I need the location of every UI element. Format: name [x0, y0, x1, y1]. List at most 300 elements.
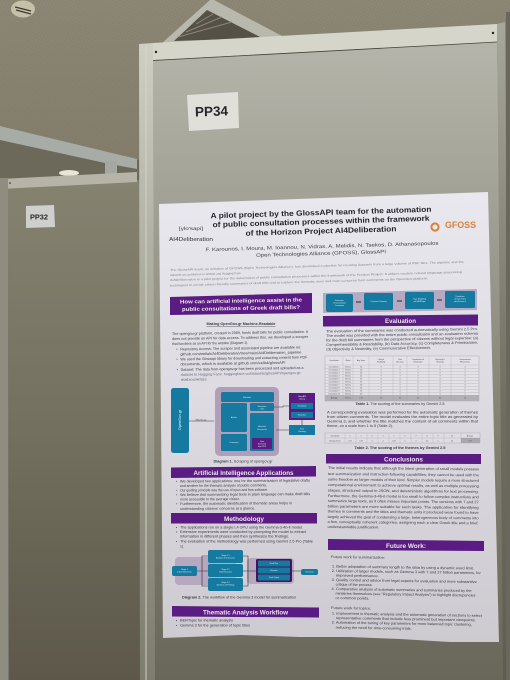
- table 1: summaries scoring: Consultation 5: [329, 377, 339, 380]
- flow strip: consultation pipeline: with Gemma 3: [454, 300, 466, 303]
- table 2: themes scoring: 4: [383, 435, 384, 437]
- table 1: summaries scoring: Objectivity &: [435, 358, 446, 361]
- panel: main display board: [139, 12, 510, 680]
- table 2: themes scoring: 4.33: [392, 440, 396, 442]
- text block: evaluation: for the draft bill summaries from the perspective of citizens without legal expertise: (a): [326, 336, 478, 342]
- table 1: summaries scoring: 3: [381, 390, 382, 392]
- text block: opengov description: •: [177, 368, 179, 372]
- table 1: summaries scoring: 3: [418, 387, 419, 389]
- text block: future work for topics: Future work for topics:: [331, 606, 371, 611]
- heading: artificial intelligence applications: Artificial Intelligence Applications: [194, 470, 294, 477]
- node: stage 3 group: Draft Plan: [270, 562, 278, 565]
- text block: AI applications bullets: [176, 479, 310, 511]
- heading: thematic analysis workflow: [172, 606, 319, 618]
- text block: AI applications bullets: We developed two applications: one for the summarization of legislative drafts: [180, 479, 310, 483]
- table 1: summaries scoring: Gemma: [345, 393, 351, 395]
- text block: future work for summarization: [330, 555, 482, 602]
- table 1: summaries scoring: 3: [400, 381, 401, 383]
- table 1: summaries scoring: Gemma: [345, 375, 351, 377]
- table 2: themes scoring: 2: [361, 435, 362, 437]
- node: stage 2 boxes: Synthesis of Findings: [217, 584, 235, 586]
- table 1: summaries scoring: 3: [440, 372, 441, 374]
- table 1: summaries scoring: Consultation 4: [329, 374, 339, 377]
- group: scraped content: Metadata: [243, 396, 252, 399]
- group: scraped content: Document: [258, 405, 267, 408]
- text block: methodology bullets: information in different phases and then synthesize the findings.: [180, 534, 289, 538]
- table 2: themes scoring: 10: [451, 435, 453, 437]
- text block: future work for summarization: 1. Better adaptation of summary length to the data by using a dynamic word limit.: [332, 565, 474, 570]
- node: stage 2 boxes: [208, 550, 243, 591]
- heading: how can AI assist: How can artificial intelligence assist in the: [180, 297, 302, 306]
- table 1: summaries scoring: 3: [440, 387, 441, 389]
- group: scraped content: Documents: [257, 428, 267, 431]
- table 1: summaries scoring: Gemma: [345, 372, 351, 374]
- text block: evaluation: The model was provided with the entire public consultation and an evaluation schema: [326, 332, 478, 338]
- node: stage 2 boxes: Data Extraction: [219, 570, 232, 574]
- text block: opengov description: •: [176, 347, 178, 351]
- text block: conclusions: a few, conceptually coherent categories, assigning each a clear Greek title and a brief,: [328, 520, 479, 525]
- table 2: themes scoring: 4: [383, 440, 384, 442]
- table 1: summaries scoring: 3: [400, 369, 401, 371]
- table 1: summaries scoring: 3: [418, 381, 419, 383]
- group: scraped content: Extracted: [258, 442, 266, 446]
- intro text: datasets are published on GitHub and Hugging Face.: [170, 271, 242, 277]
- table 1: summaries scoring: 2.8: [360, 384, 362, 386]
- table 1: summaries scoring: 2.8: [360, 387, 362, 389]
- heading: conclusions: [326, 454, 481, 464]
- table 1: summaries scoring: Gemma: [345, 381, 351, 383]
- caption: diagram 2: Diagram 2. The workflow of the Gemma 3 model for summarization: [182, 596, 296, 600]
- logo: glossapi wordmark: [γlo'sapi]: [179, 226, 203, 231]
- table 1: summaries scoring: 2.78: [359, 398, 363, 400]
- table 1: summaries scoring: 2: [418, 384, 419, 386]
- group: scraped content: Attached: [258, 425, 266, 428]
- table 1: summaries scoring: 3: [400, 375, 401, 377]
- table 1: summaries scoring: 2: [465, 372, 466, 374]
- intro text: [170, 260, 465, 287]
- table 1: summaries scoring: 3: [381, 372, 382, 374]
- text block: conclusions: stages, structured output in JSON, and deterministic algorithms for text processing.: [328, 488, 479, 494]
- arrows: workflow: [197, 556, 301, 586]
- flow strip: consultation pipeline: of Topic Titles: [454, 298, 466, 300]
- flow strip: consultation pipeline: of Consultation: [333, 302, 346, 304]
- table 1: summaries scoring: Prioritization: [413, 360, 423, 364]
- node: summary output: Summary: [305, 571, 314, 574]
- text block: future work for topics: representative comments that include less prominent but important viewpoints.: [336, 616, 476, 622]
- table 1: summaries scoring: 3: [465, 384, 466, 386]
- box: post cleaning: [289, 425, 315, 435]
- table 1: summaries scoring: Consultation 7: [329, 383, 339, 386]
- text block: AI applications bullets: •: [176, 479, 178, 483]
- table 2: themes scoring: 1: [350, 435, 351, 437]
- table 1: summaries scoring: 3: [465, 381, 466, 383]
- table 1: summaries scoring: 3: [400, 384, 401, 386]
- table 1: summaries scoring: 3: [400, 393, 401, 395]
- text block: future work for summarization: ministries themselves (see "Regulatory Impact Analysis") to highlight discrepancies: [335, 592, 476, 598]
- arrows: pipeline: [356, 300, 442, 302]
- text block: opengov description: github.com/eellak/AI4Deliberation/tree/main/AI4Deliberation_pipeline: [180, 350, 301, 356]
- table 1: summaries scoring: 3.0: [399, 398, 401, 400]
- table 1: summaries scoring: Effectiveness: [460, 360, 470, 364]
- text block: thematic analysis bullets: [176, 618, 250, 628]
- text block: evaluation: Comprehensibility & Readability, (b) Data Accuracy, (c) Completeness & Prioritization,: [326, 341, 478, 347]
- table 1: summaries scoring: 3: [381, 393, 382, 395]
- text block: evaluation: (d) Objectivity & Neutrality, (e) Communicative Effectiveness.: [326, 346, 431, 351]
- heading: future work: [328, 539, 484, 551]
- text block: conclusions: same freedom as larger models of their kind. Simpler models require a more structured: [328, 477, 479, 483]
- text block: thematic analysis bullets: •: [176, 624, 178, 628]
- text block: opengov description: documents, which is available at github.com/eellak/glossAPI: [180, 361, 285, 366]
- text block: thematic analysis bullets: BERTopic for thematic analysis: [180, 618, 233, 622]
- text block: AI applications bullets: Our guiding principle was the use of open and free software.: [180, 488, 268, 492]
- box: GlossAPI library: [289, 393, 315, 420]
- table 1: summaries scoring: 3: [418, 372, 419, 374]
- text block: opengov description: Repository Access: The scraper and associated pipeline are available on:: [180, 345, 301, 351]
- text block: future work for topics: 1. Improvement in thematic analysis and the automatic generation of sections to select: [332, 612, 482, 618]
- table 1: summaries scoring: Gemma: [345, 378, 351, 380]
- group: scraped content: [215, 387, 279, 456]
- text block: future work for summarization: 4. Comparative analysis of automatic summaries and summaries produced by the: [332, 587, 472, 593]
- table 2: themes scoring: 6: [405, 435, 406, 437]
- text block: opengov description: •: [176, 357, 178, 361]
- arrow: web-scrape: [189, 420, 214, 422]
- table 2: themes scoring: 4.5: [426, 440, 428, 442]
- table 1: summaries scoring: Consultation 2: [329, 368, 339, 371]
- text block: future work for summarization: or common points.: [335, 596, 369, 601]
- table 1: summaries scoring: 3: [465, 375, 466, 377]
- text block: conclusions: computational environment to achieve optimal results, as well as multiple processing: [328, 483, 479, 488]
- node: stage 2 boxes: Stage 2.2: [221, 568, 230, 571]
- text block: methodology bullets: Extensive experiments were conducted by prompting the model to extract: [180, 530, 306, 534]
- heading: methodology: Methodology: [224, 516, 264, 523]
- table 1: summaries scoring: 3: [465, 369, 466, 371]
- node: OpenGov.gr: [171, 388, 189, 453]
- table 2: themes scoring: 4.6: [451, 440, 453, 442]
- table 1: summaries scoring: 2.5: [464, 398, 466, 400]
- table 2: themes scoring: 4: [372, 440, 373, 442]
- flow strip: consultation pipeline: Topic Modelling: [413, 298, 426, 300]
- node: stage 1 input: [172, 566, 197, 576]
- node: OpenGov.gr: OpenGov.gr: [178, 409, 182, 430]
- flow strip: consultation pipeline: Comment Cleaning: [370, 300, 387, 303]
- node: stage 1 input: Stage 1: [181, 568, 188, 571]
- text block: methodology bullets: •: [176, 530, 178, 534]
- table 1: summaries scoring: Data: [398, 358, 402, 361]
- group: scraped content: Comments: [229, 441, 239, 444]
- label: PP34: [187, 92, 239, 131]
- table 1: summaries scoring: 3: [440, 375, 441, 377]
- table 1: summaries scoring: 2.8: [360, 372, 362, 374]
- text block: opengov description: We used the Glossapi library for downloading and extracting content from PDF: [180, 355, 308, 361]
- table 1: summaries scoring: 3.0: [360, 393, 362, 395]
- ceiling air vent: [162, 0, 282, 43]
- heading: how can AI assist: [170, 293, 312, 315]
- logo: GFOSS: [431, 220, 476, 231]
- node: summary output: [301, 569, 318, 575]
- panel: poster sheet: [159, 192, 499, 642]
- text block: conclusions: largely achieved the goal of condensing a large, heterogeneous body of comments into: [328, 515, 479, 520]
- table 1: summaries scoring: 3.0: [380, 398, 382, 400]
- text block: opengov description: that functions as an API for the website (Diagram 1).: [172, 341, 248, 346]
- heading: evaluation: [323, 314, 478, 326]
- flow strip: consultation pipeline: Comments: [335, 304, 344, 307]
- smoke detector: [11, 0, 35, 18]
- table 1: summaries scoring: 2: [418, 378, 419, 380]
- table 1: summaries scoring: 3: [440, 369, 441, 371]
- table 1: summaries scoring: 3: [418, 393, 419, 395]
- heading: methodology: [171, 513, 317, 524]
- box: post cleaning: Cleaning: [298, 431, 306, 433]
- node: stage 2 boxes: Stage 2.1: [221, 554, 230, 557]
- table 2: themes scoring: 4.37: [468, 440, 472, 442]
- table 1: summaries scoring: 2.5: [417, 398, 419, 400]
- table 1: summaries scoring: 3: [381, 366, 382, 368]
- label: PP32: PP32: [30, 212, 48, 222]
- table 1: summaries scoring: 2: [465, 390, 466, 392]
- table 1: summaries scoring: 3: [381, 381, 382, 383]
- text block: methodology bullets: •: [176, 540, 178, 544]
- table 1: summaries scoring: Consultation 3: [329, 371, 339, 374]
- table 1: summaries scoring: 3: [381, 387, 382, 389]
- box: post cleaning: Post: [300, 428, 304, 430]
- table 1: summaries scoring: 3: [400, 378, 401, 380]
- table 2: themes scoring: 5: [394, 435, 395, 437]
- table 1: summaries scoring: Gemma: [345, 398, 351, 400]
- table 2: themes scoring: 4: [438, 440, 439, 442]
- text block: conclusions: The initial results indicate that although the latest generation of small models possess: [328, 466, 479, 471]
- text block: opengov description: diaboulefsis: [181, 377, 207, 382]
- text block: thematic analysis bullets: Gemma 3 for the generation of topic titles: [180, 624, 250, 628]
- table 1: summaries scoring: 3: [440, 378, 441, 380]
- table 1: summaries scoring: Average: [331, 397, 337, 400]
- text block: opengov description: dataset to Hugging Face: huggingface.co/datasets/glossAPI/opengov.gr-: [181, 371, 302, 377]
- text block: evaluation: The evaluation of the summaries was conducted automatically using Gemini 2.5 Pro.: [326, 327, 478, 333]
- label: PP32: [26, 205, 55, 228]
- node: stage 3 group: [256, 559, 292, 582]
- table 2: themes scoring: 4.19: [359, 440, 363, 442]
- ceiling background: [0, 0, 510, 180]
- group: scraped content: Articles: [231, 416, 237, 419]
- table 1: summaries scoring: Completeness &: [412, 358, 425, 361]
- text block: AI applications bullets: and another for the thematic analysis of public comments.: [180, 483, 267, 488]
- group: scraped content: Data: [260, 440, 265, 443]
- table 1: summaries scoring: 3: [440, 384, 441, 386]
- flow strip: consultation pipeline: Extraction: [335, 299, 344, 302]
- table 1: summaries scoring: Gemma: [345, 384, 351, 386]
- table 1: summaries scoring: 3: [440, 390, 441, 392]
- table 1: summaries scoring: Clarity &: [378, 358, 385, 361]
- table 2: themes scoring: 5: [405, 440, 406, 442]
- text block: evaluation: [326, 327, 478, 351]
- node: stage 3 group: Final Output: [269, 576, 280, 579]
- text block: future work for summarization: improved performance.: [336, 574, 379, 578]
- node: stage 2 boxes: Analysis of Summaries: [216, 556, 235, 560]
- text block: automatic themes evaluation: [327, 410, 478, 428]
- text block: opengov description: does not provide an API for data access. To address this, we developed a scraper: [172, 335, 309, 341]
- heading: how can AI assist: public consultations of Greek draft bills?: [182, 305, 300, 313]
- table 2: themes scoring: 9: [438, 435, 439, 437]
- group: scraped content: from PDF: [258, 445, 267, 448]
- table 1: summaries scoring: Consultation 6: [329, 380, 339, 383]
- logo: AI4Deliberation: AI4Deliberation: [169, 237, 213, 243]
- text block: future work for topics: reducing the need for time-consuming trials.: [336, 626, 412, 631]
- text block: conclusions: [327, 466, 479, 530]
- table 1: summaries scoring: 2: [465, 387, 466, 389]
- text block: future work for summarization: critique of the process.: [336, 583, 373, 587]
- table 1: summaries scoring: Readability: [377, 360, 385, 364]
- text block: AI applications bullets: •: [176, 502, 178, 506]
- table 1: summaries scoring: 3: [381, 375, 382, 377]
- heading: conclusions: Conclusions: [384, 456, 423, 464]
- label: PP34: PP34: [195, 103, 229, 120]
- table 1: summaries scoring: 3: [400, 387, 401, 389]
- text block: AI applications bullets: understanding citizens' concerns at a glance.: [180, 506, 255, 511]
- box: GlossAPI library: GlossAPI: [298, 395, 306, 398]
- text block: automatic themes evaluation: theme, on a scale from 1 to 5 (Table 2).: [327, 424, 393, 428]
- logo: GFOSS: GFOSS: [445, 220, 476, 231]
- arrows: document flow: [274, 406, 302, 430]
- authors: F. Karounos, I. Moura, M. Ioannou, N. Vidras, A. Melidis, N. Tsekos, D. Athanasopoulos: [205, 241, 439, 253]
- flow strip: consultation pipeline: Production: [455, 295, 465, 298]
- table 1: summaries scoring: 3.0: [360, 366, 362, 368]
- text block: conclusions: billion parameters are more suitable for such tasks. The application for identifying: [328, 504, 479, 510]
- table 1: summaries scoring: Model: [346, 360, 351, 362]
- table 1: summaries scoring: 3.0: [360, 381, 362, 383]
- text block: future work for summarization: 3. Quality control and advice from legal experts for evaluation and more substantive: [332, 578, 477, 584]
- table 1: summaries scoring: 3: [381, 369, 382, 371]
- table 2: themes scoring: Average Score: [329, 439, 341, 442]
- caption: table 2: Table 2. The scoring of the themes by Gemini 2.5: [354, 446, 446, 450]
- diagram 2: workflow of the Gemma 3 model: [172, 550, 318, 591]
- text block: AI applications bullets: more accessible to the average citizen.: [180, 497, 240, 501]
- table 1: summaries scoring: 2.6: [360, 378, 362, 380]
- table 1: summaries scoring: Gemma: [345, 387, 351, 389]
- table 1: summaries scoring: 3: [440, 393, 441, 395]
- text block: AI applications bullets: We believe that summarizing legal texts in plain language can make draft bills: [180, 492, 310, 497]
- text block: conclusions: understandable justification.: [327, 525, 380, 529]
- table 2: themes scoring: Consultation: [330, 434, 340, 437]
- table 1: summaries scoring: 3: [440, 366, 441, 368]
- table 1: summaries scoring: 3: [381, 384, 382, 386]
- subheading: making opengov machine-readable: Making OpenGov.gr Machine-Readable: [206, 322, 276, 326]
- box: GlossAPI library: Library: [299, 398, 305, 400]
- intro text: AI4Deliberation is a pilot project for the automation of public consultation processes within the framework of the Horizon Project. It utilizes modern natural language processing: [170, 270, 462, 282]
- caption: table 1: Table 1. The scoring of the summaries by Gemini 2.5: [356, 402, 445, 406]
- table 1: summaries scoring: 3.0: [360, 375, 362, 377]
- panel: neighbouring board PP32: [0, 172, 140, 680]
- table 2: themes scoring: 4.47: [348, 440, 352, 442]
- title: A pilot project by the GlossAPI team for the automation: [210, 205, 432, 220]
- text block: methodology bullets: The applications run on a single L4 GPU using the Gemma-3-4b-it model.: [180, 526, 303, 530]
- text block: AI applications bullets: •: [176, 493, 178, 497]
- table 1: summaries scoring: Consultation 1: [329, 365, 339, 368]
- table 1: summaries scoring: 3.0: [439, 398, 441, 400]
- table 1: summaries scoring: Gemma: [345, 369, 351, 371]
- caption: diagram 1: Diagram 1. Scraping of opengov.gr: [214, 460, 273, 464]
- table 1: summaries scoring: Neutrality: [436, 360, 444, 364]
- text block: methodology bullets: •: [176, 526, 178, 530]
- table 2: themes scoring: 8: [427, 435, 428, 437]
- table 1: summaries scoring: 3: [381, 378, 382, 380]
- node: stage 3 group: Revision: [270, 570, 278, 572]
- table 1: summaries scoring: 2: [418, 369, 419, 371]
- text block: methodology bullets: 1).: [180, 544, 184, 548]
- authors: [205, 241, 439, 259]
- text block: methodology bullets: The evaluation of the methodology was performed using Gemini 2.5 Pro (Table: [180, 540, 313, 544]
- table 1: summaries scoring: 3: [465, 393, 466, 395]
- intro text: techniques to create citizen-friendly summaries of draft bills and to capture the thematic axes and main concerns from comments on the OpenGov platform.: [170, 276, 428, 287]
- text block: AI applications bullets: Furthermore, the automatic identification of thematic areas helps in: [180, 501, 292, 506]
- text block: future work for summarization: Future work for summarization:: [331, 555, 385, 560]
- table 1: summaries scoring: Gemma: [345, 390, 351, 392]
- heading: artificial intelligence applications: [171, 466, 316, 478]
- text block: methodology bullets: [176, 526, 313, 548]
- table 1: summaries scoring: Avg. Score: [357, 359, 365, 362]
- heading: future work: Future Work:: [386, 543, 426, 550]
- table 1: summaries scoring: 3: [418, 375, 419, 377]
- arrow: web-scrape: Web-Scrape: [195, 420, 207, 422]
- text block: future work for topics: [331, 606, 482, 632]
- table 1: summaries scoring: Consultation 8: [329, 386, 339, 389]
- table 2: themes scoring: 3: [372, 435, 373, 437]
- table 1: summaries scoring: 3: [400, 366, 401, 368]
- title: [210, 205, 432, 238]
- group: scraped content: Links: [260, 408, 264, 410]
- table 2: themes scoring: 7: [416, 435, 417, 437]
- text block: future work for summarization: 2. Utilization of larger models, such as Gemma 3 with 7 and 27 billion parameters, for: [332, 569, 482, 575]
- table 1: summaries scoring: Communicative: [459, 358, 471, 361]
- text block: conclusions: themes in comments and the titles and thematic units it produced were found to have: [328, 509, 479, 515]
- heading: thematic analysis workflow: Thematic Analysis Workflow: [203, 610, 288, 616]
- table 1: summaries scoring: 3: [465, 366, 466, 368]
- text block: opengov description: Dataset: The data from opengov.gr has been processed and uploaded as a: [181, 366, 304, 372]
- table 1: summaries scoring: Consultation 10: [328, 392, 340, 395]
- table 2: themes scoring: Average: [467, 434, 473, 437]
- node: stage 1 input: Initial Summaries: [177, 570, 192, 574]
- table 1: summaries scoring: 3: [400, 372, 401, 374]
- text block: conclusions: text summarization and instruction-following capabilities, they cannot be used with the: [328, 472, 479, 477]
- heading: evaluation: Evaluation: [385, 318, 416, 325]
- flow strip: consultation pipeline: [323, 289, 477, 313]
- table 1: summaries scoring: 2: [418, 390, 419, 392]
- table 1: summaries scoring: 2.8: [360, 369, 362, 371]
- text block: AI applications bullets: •: [176, 488, 178, 492]
- text block: automatic themes evaluation: A corresponding evaluation was performed for the automatic generation of themes: [327, 410, 478, 414]
- table 1: summaries scoring: Gemma: [345, 366, 351, 368]
- node: stage 2 boxes: Stage 2.3: [221, 581, 230, 584]
- text block: opengov description: The opengov.gr platform, created in 2009, hosts draft bills for public consultation. It: [172, 330, 308, 336]
- table 1: summaries scoring: Consultation: [329, 359, 339, 362]
- text block: conclusions: summarize large texts, as it often misses important points. The versions with 7 and 27: [328, 499, 479, 504]
- intro text: The GlossAPI team, an initiative of GFOSS (Open Technologies Alliance), has developed a pipeline for creating datasets from a large volume of PDF files. The pipeline and the: [170, 260, 465, 272]
- table 1: summaries scoring: 2.6: [360, 390, 362, 392]
- table 1: summaries scoring: 3: [440, 381, 441, 383]
- table 2: themes scoring: 4: [416, 440, 417, 442]
- background wall and window beam: [0, 126, 139, 180]
- table 1: summaries scoring: 3: [418, 366, 419, 368]
- table 1: summaries scoring: 3: [400, 390, 401, 392]
- authors: Open Technologies Alliance (GFOSS), GlossAPI: [256, 249, 386, 259]
- title: of the Horizon Project AI4Deliberation: [245, 224, 397, 238]
- box: GlossAPI library: Extraction: [298, 414, 306, 416]
- title: of public consultation processes within the framework: [212, 214, 430, 229]
- table 1: summaries scoring: 2: [465, 378, 466, 380]
- text block: thematic analysis bullets: •: [176, 618, 178, 622]
- table 1: summaries scoring: Accuracy: [397, 360, 404, 364]
- box: GlossAPI library: Download: [298, 406, 306, 408]
- text block: automatic themes evaluation: Gemma 3, and whether the title matches the content of all comments within that: [327, 420, 478, 424]
- table 1: summaries scoring: Consultation 9: [329, 389, 339, 392]
